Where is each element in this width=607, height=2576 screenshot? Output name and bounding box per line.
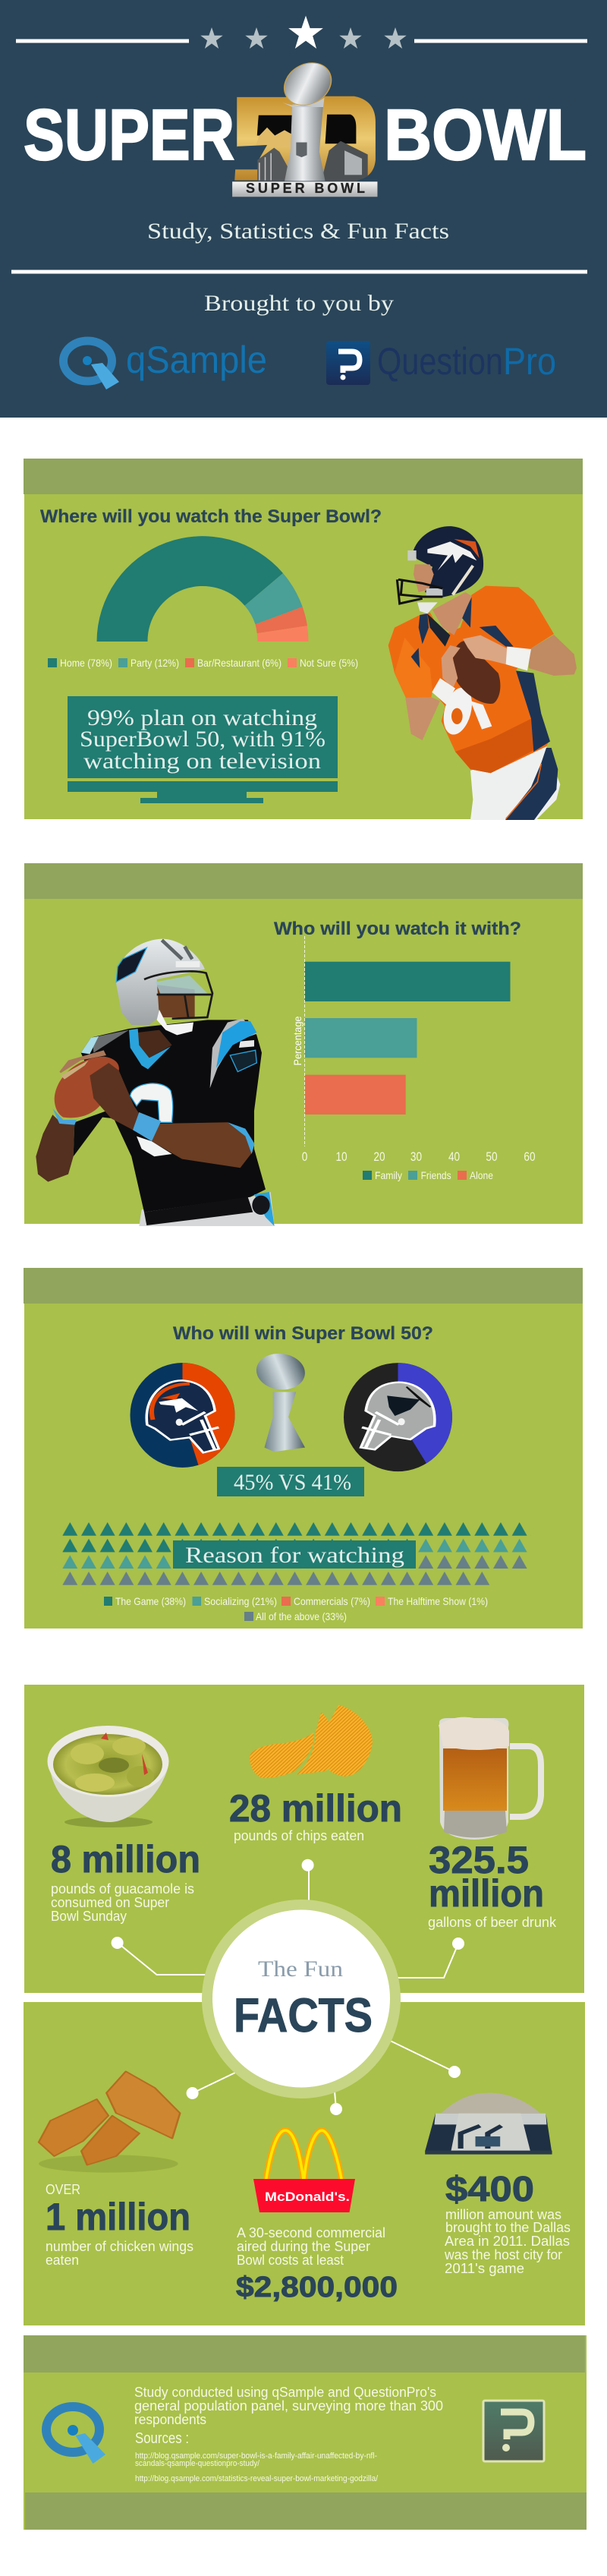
callout: reason for watching: Reason for watching — [185, 1543, 404, 1568]
panel: footer — [24, 2335, 587, 2530]
title: SUPER BOWL: SUPER — [24, 95, 234, 175]
bar chart — [291, 936, 536, 1164]
stat: $400 million: 2011's game — [445, 2261, 524, 2276]
bar chart: Percentage — [291, 1016, 304, 1066]
pictogram: reason for watching triangles — [62, 1522, 530, 1588]
stat: 28 million: 28 million — [229, 1787, 402, 1830]
stat: $400 million: million amount was — [445, 2207, 561, 2222]
stat: over 1 million — [46, 2182, 193, 2268]
panel: where will you watch — [24, 459, 583, 819]
bar chart: 20 — [373, 1150, 385, 1164]
stat: 8 million: Bowl Sunday — [51, 1909, 127, 1924]
stat: 8 million — [51, 1838, 200, 1924]
stat: $400 million: brought to the Dallas — [445, 2220, 571, 2235]
stat: 28 million: pounds of chips eaten — [234, 1828, 364, 1843]
stat: over 1 million: eaten — [46, 2253, 79, 2268]
logo: Super Bowl 50 — [232, 58, 377, 197]
logo: qSample — [64, 339, 267, 389]
callout: reason for watching — [173, 1540, 416, 1569]
badge: the fun facts: The Fun — [258, 1956, 343, 1982]
stat: commercial cost — [236, 2225, 398, 2303]
callout: television: 99% plan on watching — [87, 705, 317, 730]
icon: chicken wings — [39, 2071, 180, 2173]
stat: $400 million: was the host city for — [444, 2247, 562, 2262]
heading: Where will you watch the Super Bowl? — [40, 506, 382, 527]
logo: QuestionPro: Pro — [503, 340, 556, 383]
logo: QuestionPro: Question — [377, 340, 503, 383]
icon: chips — [250, 1705, 373, 1778]
title: SUPER BOWL — [24, 95, 587, 175]
chart legend — [104, 1595, 488, 1622]
callout: television: watching on television — [83, 749, 321, 774]
title: SUPER BOWL: BOWL — [384, 95, 587, 175]
connector dots — [112, 1859, 464, 2115]
panel: who will you watch it with — [24, 863, 583, 1224]
chart legend: All of the above (33%) — [256, 1610, 347, 1622]
pie: Broncos 45% with helmet — [131, 1363, 235, 1468]
stat: 325.5 million: 325.5 — [429, 1839, 529, 1881]
bar chart: 40 — [448, 1150, 460, 1164]
pie: Panthers 41% with helmet — [344, 1363, 452, 1471]
callout: 45% vs 41%: 45% VS 41% — [234, 1470, 351, 1495]
connector lines — [118, 1868, 458, 2109]
bar chart: 30 — [410, 1150, 422, 1164]
panel: header — [0, 0, 607, 418]
logo: Super Bowl 50: SUPER BOWL — [246, 181, 365, 196]
chart legend: Socializing (21%) — [204, 1595, 277, 1607]
stat: $400 million: $400 — [445, 2169, 534, 2209]
chart legend: Bar/Restaurant (6%) — [197, 657, 281, 669]
panel: fun facts bottom — [24, 2002, 585, 2325]
heading: Who will win Super Bowl 50? — [173, 1323, 433, 1344]
study note: Study conducted using qSample and QuestionPro's — [134, 2385, 436, 2400]
badge: the fun facts — [202, 1900, 401, 2098]
illustration: Panthers quarterback — [36, 939, 275, 1226]
icon: McDonald's — [253, 2130, 355, 2212]
chart legend — [363, 1169, 493, 1181]
stat: commercial cost: A 30-second commercial — [237, 2225, 385, 2240]
chart legend: Commercials (7%) — [294, 1595, 370, 1607]
trophy — [250, 1350, 311, 1452]
callout: television — [68, 696, 338, 803]
stat: commercial cost: $2,800,000 — [236, 2272, 398, 2303]
icon: beer mug — [439, 1717, 541, 1840]
icon: stadium — [425, 2093, 552, 2155]
stat: over 1 million: OVER — [46, 2182, 80, 2197]
stat: 325.5 million — [428, 1839, 557, 1930]
logo: qSample: qSample — [126, 339, 267, 381]
heading: Who will you watch it with? — [274, 919, 521, 939]
chart legend: Party (12%) — [131, 657, 179, 669]
source links — [135, 2451, 379, 2483]
stat: 325.5 million: million — [429, 1872, 544, 1915]
stat: 8 million: consumed on Super — [51, 1895, 169, 1910]
study note: general population panel, surveying more than 300 — [134, 2398, 443, 2414]
logo: QuestionPro mark — [483, 2401, 544, 2461]
logo: QuestionPro — [326, 340, 556, 385]
bar chart: 60 — [524, 1150, 536, 1164]
icon: guacamole bowl — [47, 1726, 168, 1827]
chart legend: Alone — [470, 1169, 493, 1181]
stat: commercial cost: Bowl costs at least — [237, 2253, 344, 2268]
study note: respondents — [134, 2412, 206, 2427]
bar chart: 10 — [335, 1150, 348, 1164]
brought to you by: Brought to you by — [204, 291, 394, 316]
stat: over 1 million: number of chicken wings — [46, 2239, 193, 2254]
half donut chart — [97, 536, 309, 642]
illustration: Broncos quarterback — [388, 526, 577, 820]
stars and rules ornament — [16, 16, 587, 49]
panel: fun facts top — [24, 1685, 584, 1993]
stat: 8 million: pounds of guacamole is — [51, 1881, 194, 1897]
bar chart: 50 — [486, 1150, 498, 1164]
source links: http://blog.qsample.com/super-bowl-is-a-family-affair-unaffected-by-nfl- — [135, 2451, 377, 2461]
stat: $400 million — [444, 2169, 571, 2276]
chart legend: Not Sure (5%) — [300, 657, 358, 669]
stat: commercial cost: aired during the Super — [237, 2239, 370, 2254]
source links: http://blog.qsample.com/statistics-reveal-super-bowl-marketing-godzilla/ — [135, 2474, 379, 2483]
stat: 8 million: 8 million — [51, 1838, 200, 1881]
icon: McDonald's: McDonald's. — [265, 2190, 350, 2204]
logo: qSample mark — [46, 2407, 105, 2464]
source links: scandals-qsample-questionpro-study/ — [135, 2459, 260, 2468]
chart legend: Family — [375, 1169, 402, 1181]
chart legend: Home (78%) — [60, 657, 112, 669]
chart legend — [48, 657, 358, 669]
callout: television: SuperBowl 50, with 91% — [80, 727, 326, 752]
stat: over 1 million: 1 million — [46, 2196, 190, 2238]
subtitle: Study, Statistics & Fun Facts — [147, 219, 449, 244]
bar chart: 0 — [302, 1150, 307, 1164]
panel: who will win — [24, 1268, 583, 1629]
chart legend: The Game (38%) — [115, 1595, 186, 1607]
study note: Sources : — [135, 2430, 189, 2447]
chart legend: Friends — [421, 1169, 451, 1181]
stat: $400 million: Area in 2011. Dallas — [445, 2234, 570, 2249]
badge: the fun facts: FACTS — [234, 1989, 373, 2042]
chart legend: The Halftime Show (1%) — [388, 1595, 488, 1607]
study note — [134, 2385, 443, 2447]
stat: 325.5 million: gallons of beer drunk — [428, 1915, 557, 1930]
